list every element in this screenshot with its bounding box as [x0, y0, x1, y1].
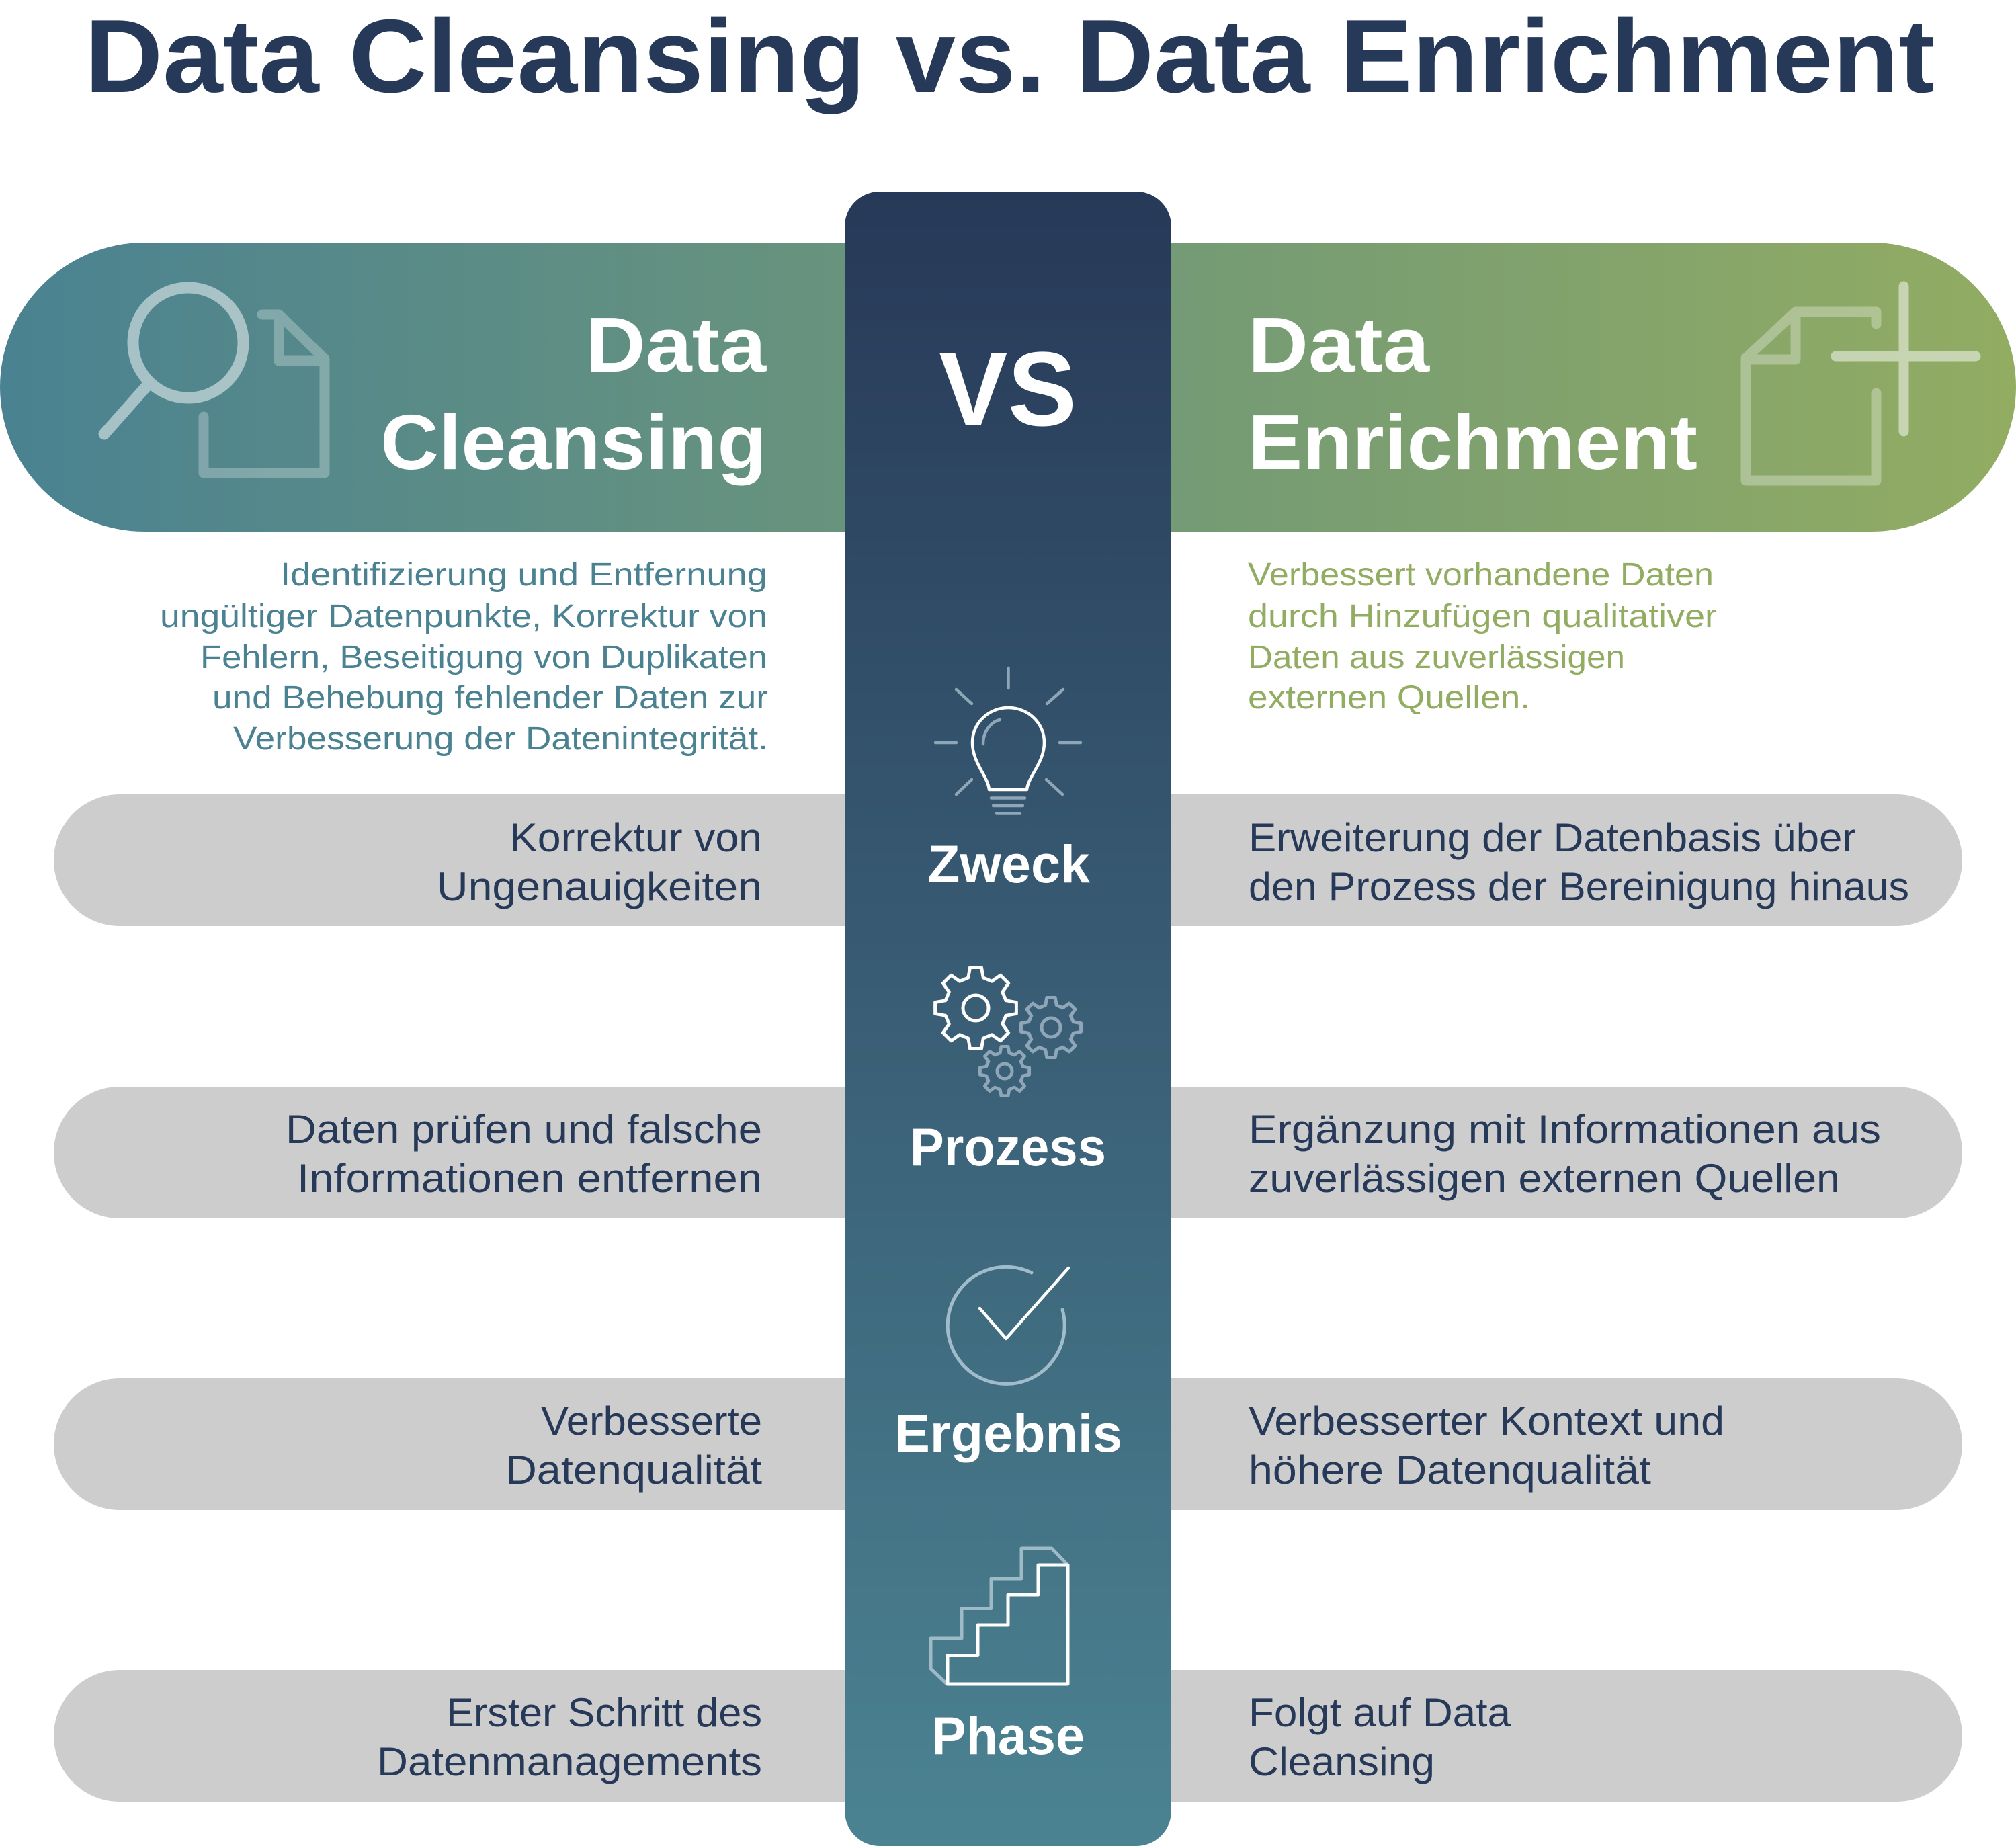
text: Zweck right [1249, 815, 1909, 909]
label: Zweck: Zweck [927, 834, 1091, 894]
text: Data Cleansing description [160, 557, 768, 757]
text: Zweck left: Korrektur von [509, 815, 762, 860]
text: Ergebnis left: Verbesserte [541, 1398, 762, 1443]
text: Zweck right: den Prozess der Bereinigung hinaus [1249, 864, 1909, 909]
text: Data Enrichment description: externen Quellen. [1248, 680, 1530, 716]
text: Data Enrichment description: Verbessert vorhandene Daten [1248, 557, 1714, 593]
heading: Data Enrichment [1248, 301, 1697, 486]
text: Ergebnis right: höhere Datenqualität [1249, 1448, 1651, 1493]
text: Phase left [377, 1690, 762, 1784]
text: Data Cleansing description: Verbesserung der Datenintegrität. [233, 721, 768, 757]
VS label: VS [939, 331, 1077, 448]
label: Prozess: Prozess [910, 1117, 1106, 1177]
text: Data Enrichment description [1248, 557, 1717, 716]
text: Prozess right [1249, 1107, 1881, 1201]
heading: Data Enrichment: Enrichment [1248, 398, 1697, 486]
heading: Data Enrichment: Data [1248, 301, 1431, 388]
label: Phase: Phase [931, 1706, 1085, 1765]
row: Ergebnis pill [54, 1378, 1962, 1510]
label: Ergebnis: Ergebnis [894, 1403, 1122, 1463]
title: Data Cleansing vs. Data Enrichment [85, 0, 1935, 114]
row: Prozess pill [54, 1087, 1962, 1218]
text: Zweck left [437, 815, 762, 909]
text: Phase right [1249, 1690, 1511, 1784]
text: Ergebnis right: Verbesserter Kontext und [1249, 1398, 1724, 1443]
row: Zweck pill [54, 794, 1962, 926]
text: Phase right: Folgt auf Data [1249, 1690, 1511, 1735]
icon: gears [935, 968, 1081, 1096]
icon: check mark in circle [948, 1267, 1068, 1384]
text: Prozess left: Daten prüfen und falsche [286, 1107, 762, 1152]
text: Ergebnis left: Datenqualität [505, 1448, 762, 1493]
text: Ergebnis left [505, 1398, 762, 1493]
text: Data Enrichment description: durch Hinzufügen qualitativer [1248, 599, 1717, 634]
text: Data Cleansing description: Fehlern, Beseitigung von Duplikaten [200, 640, 767, 675]
text: Prozess right: zuverlässigen externen Quellen [1249, 1156, 1840, 1201]
text: Zweck right: Erweiterung der Datenbasis über [1249, 815, 1856, 860]
text: Ergebnis right [1249, 1398, 1724, 1493]
text: Phase left: Erster Schritt des [446, 1690, 762, 1735]
row: Phase pill [54, 1670, 1962, 1802]
text: Prozess left [286, 1107, 762, 1201]
heading: Data Cleansing: Data [585, 301, 767, 388]
icon: light bulb [935, 668, 1081, 813]
heading: Data Cleansing [380, 301, 767, 486]
text: Zweck left: Ungenauigkeiten [437, 864, 762, 909]
text: Phase right: Cleansing [1249, 1739, 1435, 1784]
icon: magnifier over document [104, 288, 325, 473]
text: Phase left: Datenmanagements [377, 1739, 762, 1784]
text: Data Cleansing description: Identifizierung und Entfernung [280, 557, 767, 593]
banner: gradient header band [0, 243, 2016, 532]
heading: Data Cleansing: Cleansing [380, 398, 767, 486]
text: Data Enrichment description: Daten aus zuverlässigen [1248, 640, 1625, 675]
center column [845, 192, 1171, 1846]
text: Data Cleansing description: ungültiger Datenpunkte, Korrektur von [160, 599, 767, 634]
icon: document with plus [1746, 286, 1976, 480]
icon: stairs [931, 1548, 1068, 1684]
text: Prozess left: Informationen entfernen [297, 1156, 762, 1201]
text: Data Cleansing description: und Behebung fehlender Daten zur [212, 680, 768, 716]
text: Prozess right: Ergänzung mit Informationen aus [1249, 1107, 1881, 1152]
